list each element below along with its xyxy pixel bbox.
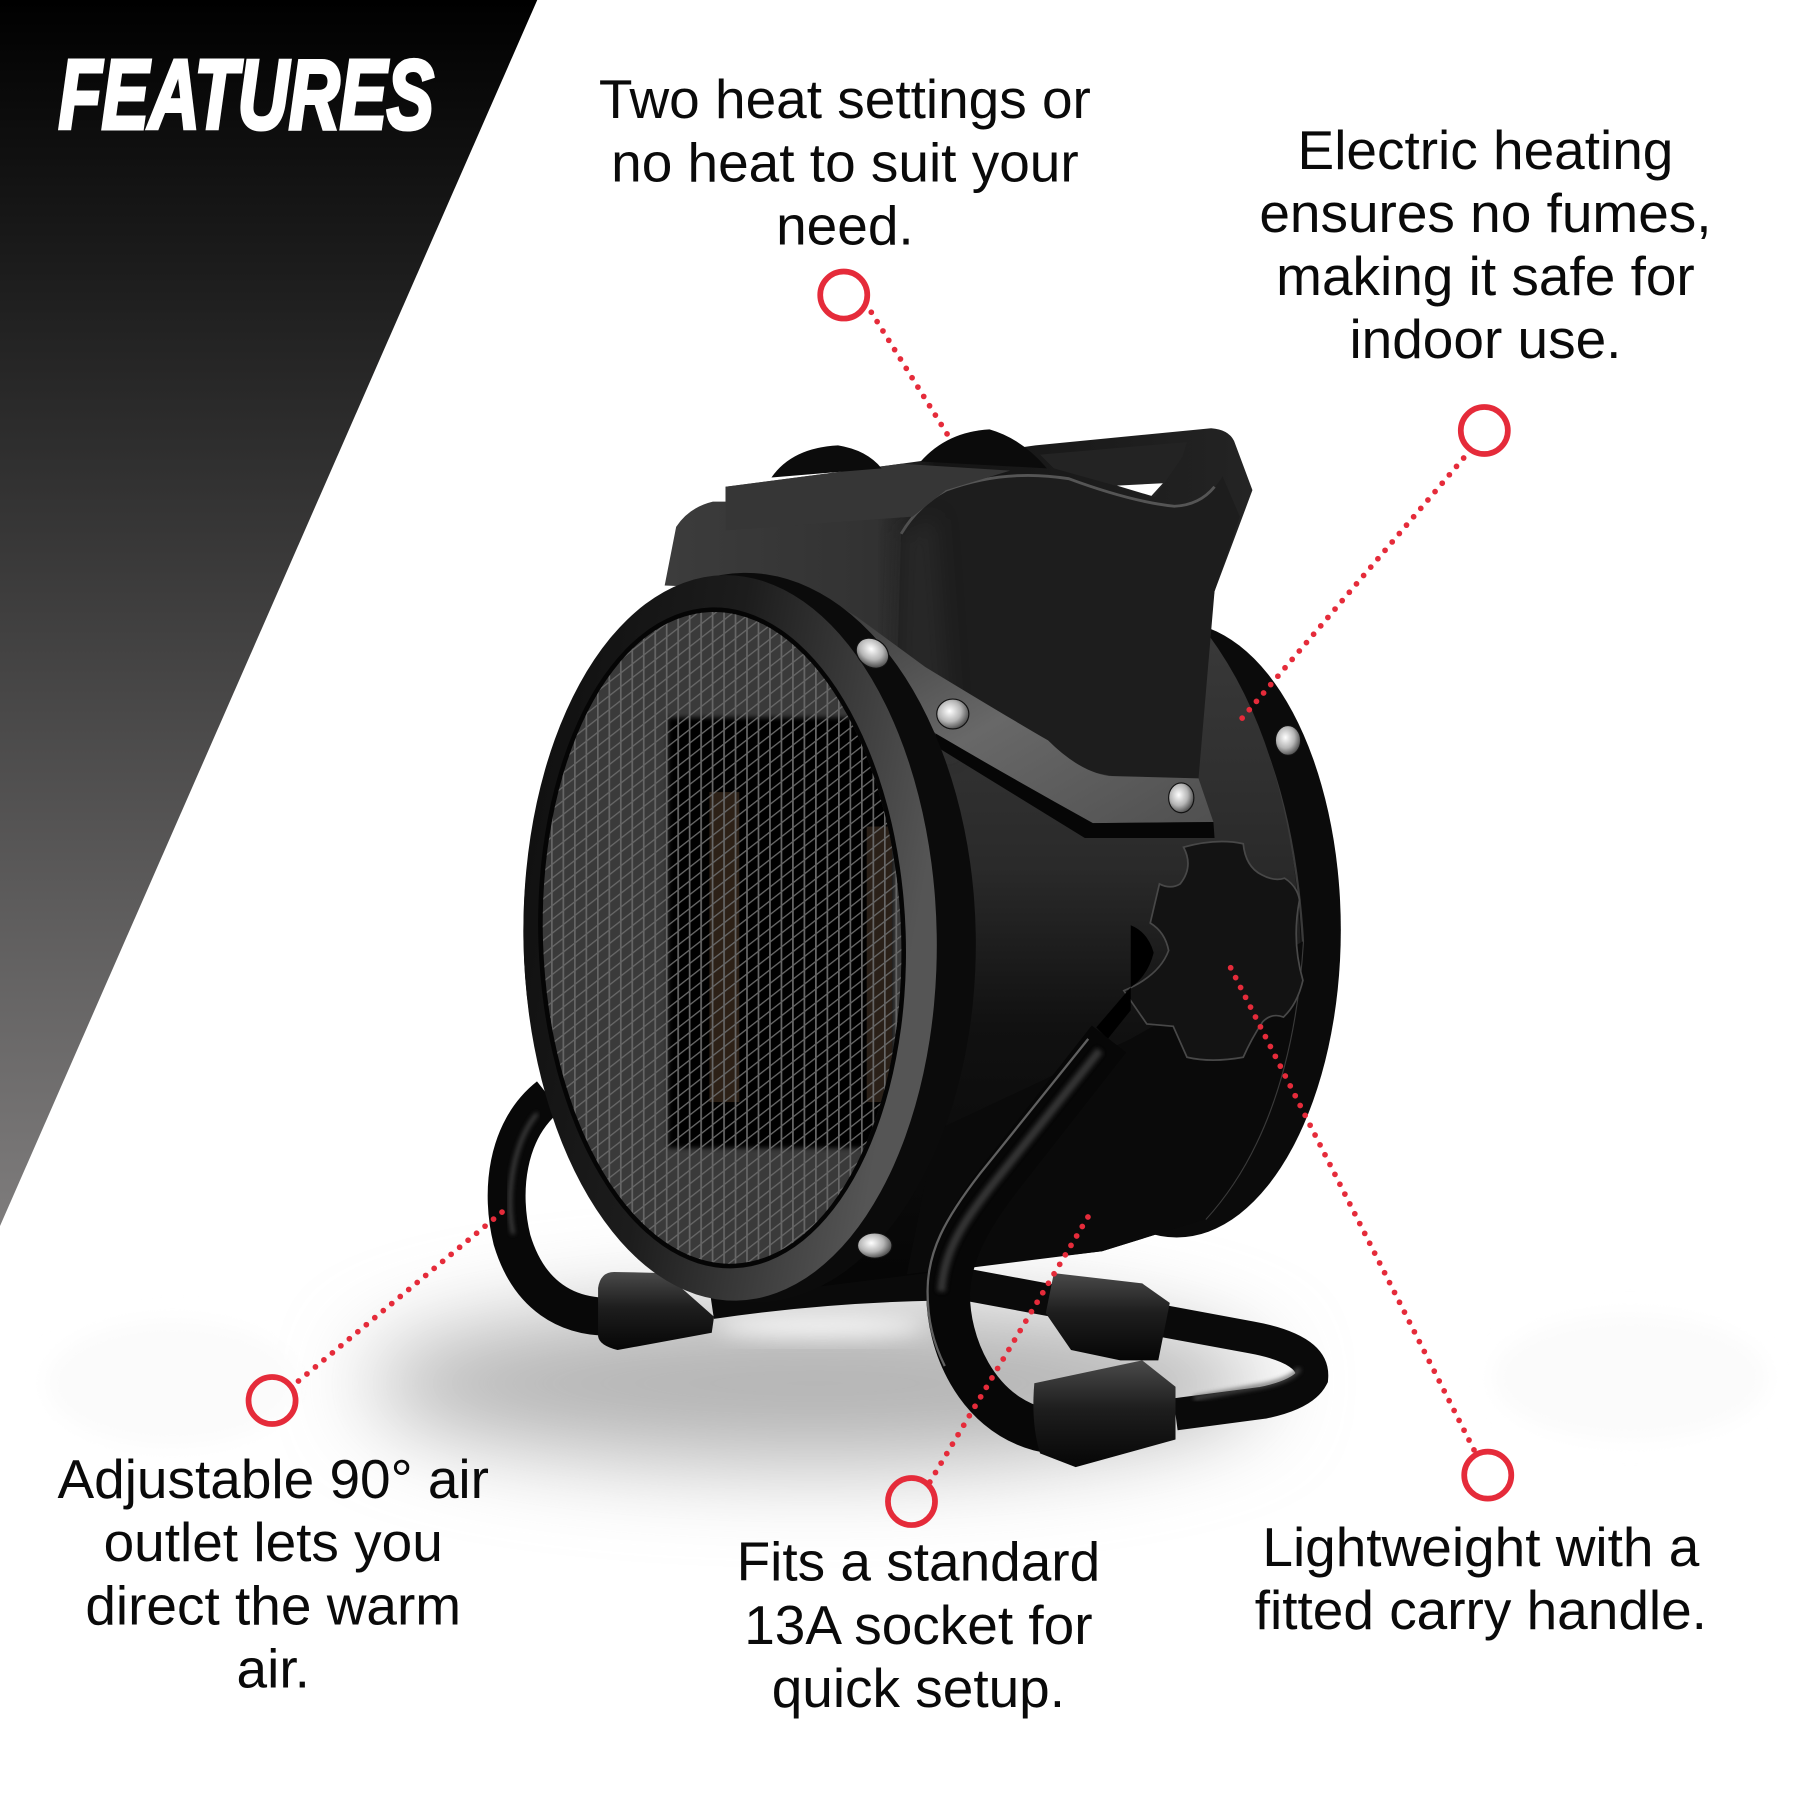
metal strap [820, 595, 1213, 823]
housing wave highlight [901, 475, 1215, 534]
callout line: air outlet [298, 1208, 507, 1381]
callout marker: socket [888, 1478, 935, 1525]
right control knob [921, 429, 1047, 468]
lower body shading [907, 941, 1303, 1274]
callout text: lightweight: Lightweight with a [1262, 1516, 1700, 1578]
back ring inner edge [1203, 638, 1303, 1219]
diagonal gradient panel [0, 0, 537, 1226]
callout line: electric heating [1240, 458, 1464, 721]
rear and right stand bar [947, 1281, 1312, 1414]
left foot sleeve [598, 1272, 714, 1350]
left loop highlight [510, 1114, 537, 1234]
callout text: socket: 13A socket for [744, 1594, 1093, 1656]
callout line: heat settings [871, 312, 953, 443]
base arc [712, 1286, 936, 1304]
front ring [517, 572, 943, 1304]
stand bar highlight [1194, 1368, 1299, 1398]
back ring [1012, 622, 1341, 1238]
callout text: electric heating: Electric heating [1298, 119, 1673, 181]
callout text: lightweight: fitted carry handle. [1255, 1579, 1707, 1641]
tube centre sheen [941, 1050, 1100, 1291]
knob socket [1096, 925, 1154, 1039]
front stand tube [948, 1039, 1109, 1441]
callout marker: lightweight [1464, 1452, 1511, 1499]
floor shadow [46, 1303, 1768, 1464]
grille base [527, 601, 917, 1275]
callout marker: heat settings [820, 271, 867, 319]
callout marker: electric heating [1461, 407, 1508, 454]
callout text: electric heating: ensures no fumes, [1259, 182, 1712, 244]
callout text: heat settings: Two heat settings or [599, 68, 1091, 130]
front outer band [517, 569, 982, 1307]
title: FEATURES [59, 40, 434, 150]
callout text: heat settings: need. [776, 195, 914, 257]
housing wave front [895, 475, 1240, 792]
screws [850, 632, 1301, 1258]
wire mesh grille [542, 612, 902, 1264]
left stand loop [507, 1096, 608, 1317]
control tray [726, 464, 1010, 530]
callout text: electric heating: making it safe for [1276, 245, 1695, 307]
callout text: electric heating: indoor use. [1349, 308, 1621, 370]
rear foot sleeve [1046, 1273, 1170, 1360]
callout text: air outlet: air. [237, 1638, 310, 1700]
callout text: socket: Fits a standard [737, 1531, 1100, 1593]
front foot sleeve [1033, 1360, 1176, 1467]
callout text: heat settings: no heat to suit your [611, 131, 1079, 193]
heater product illustration [507, 428, 1341, 1467]
drum body [735, 580, 1301, 1297]
callout line: lightweight [1228, 963, 1474, 1450]
housing and carry handle [665, 428, 1252, 792]
handle window [1040, 442, 1187, 497]
handle gap [1117, 483, 1163, 496]
callout text: socket: quick setup. [772, 1657, 1065, 1719]
left control knob [771, 445, 882, 478]
housing shading [895, 517, 953, 758]
tube edge highlight [928, 1039, 1088, 1366]
callout marker: air outlet [249, 1377, 296, 1424]
strap underside [936, 734, 1215, 838]
callout text: air outlet: direct the warm [85, 1574, 461, 1636]
callout line: socket [930, 1215, 1089, 1482]
callout text: air outlet: Adjustable 90° air [57, 1448, 489, 1510]
callout text: air outlet: outlet lets you [104, 1511, 443, 1573]
side knob [1124, 842, 1303, 1060]
